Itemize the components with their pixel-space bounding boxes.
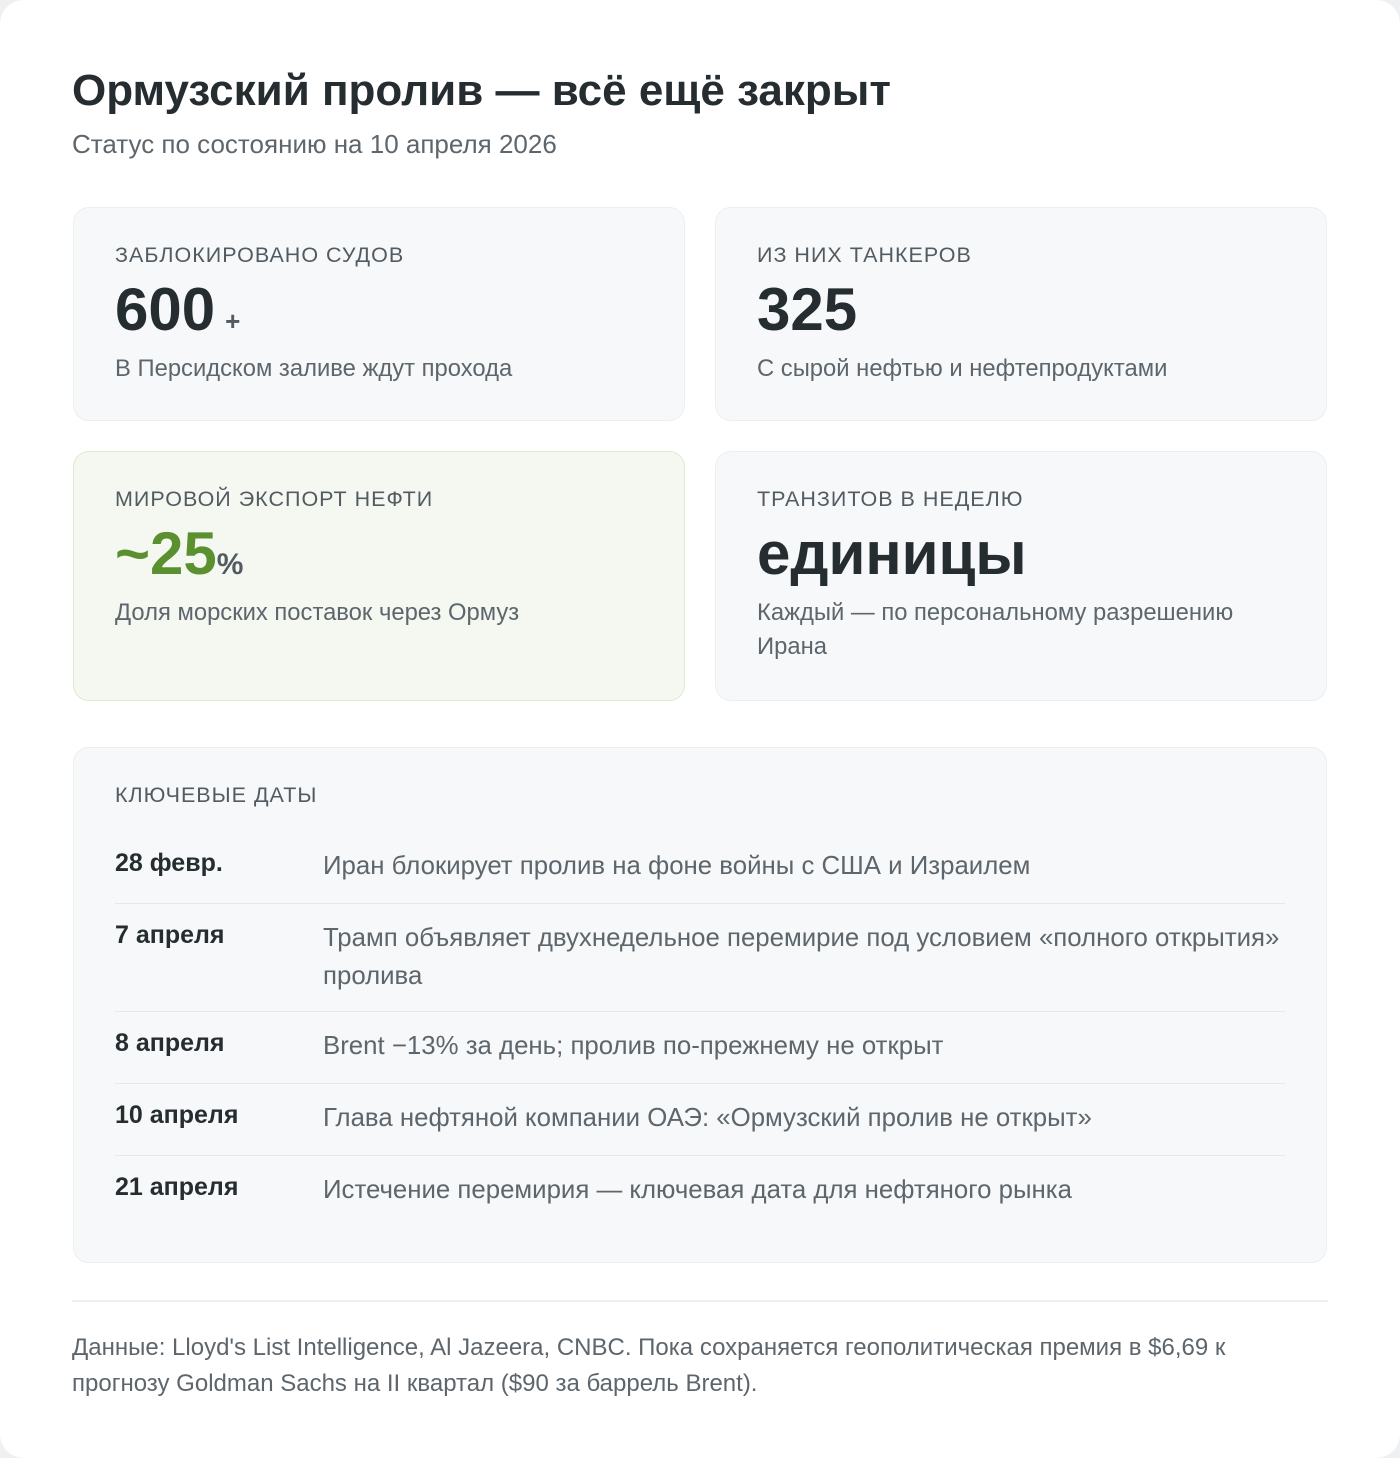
row 28 feb: 28 февр.	[115, 849, 223, 877]
panel: oil export share: ~25%	[115, 520, 243, 587]
title: Ормузский пролив — всё ещё закрыт	[72, 66, 891, 115]
panel: tankers: 325	[757, 276, 857, 343]
row 28 feb: Иран блокирует пролив на фоне войны с США и Израилем	[323, 852, 1030, 880]
panel: transits: Каждый — по персональному разрешению Ирана	[757, 599, 1233, 660]
row 7 april	[115, 904, 1285, 1012]
panel: key dates	[73, 747, 1327, 1263]
row 28 feb	[115, 832, 1285, 904]
panel: tankers: С сырой нефтью и нефтепродуктами	[757, 355, 1167, 382]
panel: blocked ships: В Персидском заливе ждут прохода	[115, 355, 512, 382]
row 21 april: Истечение перемирия — ключевая дата для нефтяного рынка	[323, 1176, 1072, 1204]
row 8 april: Brent −13% за день; пролив по-прежнему не открыт	[323, 1032, 943, 1060]
row 21 april: 21 апреля	[115, 1173, 238, 1201]
row 7 april: Трамп объявляет двухнедельное перемирие под условием «полного открытия» пролива	[323, 924, 1279, 990]
row 10 april	[115, 1084, 1285, 1156]
row 8 april: 8 апреля	[115, 1029, 224, 1057]
panel: blocked ships: ЗАБЛОКИРОВАНО СУДОВ	[115, 243, 404, 267]
panel: oil export share	[73, 451, 685, 701]
panel: oil export share: МИРОВОЙ ЭКСПОРТ НЕФТИ	[115, 487, 433, 511]
panel: tankers	[715, 207, 1327, 421]
footer note: Данные: Lloyd's List Intelligence, Al Jazeera, CNBC. Пока сохраняется геополитическая премия в $6,69 к прогнозу Goldman Sachs на II квартал ($90 за баррель Brent).	[72, 1334, 1225, 1397]
panel: blocked ships: 600 +	[115, 276, 240, 343]
row 7 april: 7 апреля	[115, 921, 224, 949]
row 10 april: Глава нефтяной компании ОАЭ: «Ормузский пролив не открыт»	[323, 1104, 1092, 1132]
panel: transits: единицы	[757, 520, 1027, 587]
row 10 april: 10 апреля	[115, 1101, 238, 1129]
subtitle: Статус по состоянию на 10 апреля 2026	[72, 129, 557, 159]
panel: transits: ТРАНЗИТОВ В НЕДЕЛЮ	[757, 487, 1023, 511]
panel: transits	[715, 451, 1327, 701]
panel: key dates: КЛЮЧЕВЫЕ ДАТЫ	[115, 783, 317, 807]
row 8 april	[115, 1012, 1285, 1084]
panel: oil export share: Доля морских поставок через Ормуз	[115, 599, 519, 626]
panel: blocked ships	[73, 207, 685, 421]
panel: tankers: ИЗ НИХ ТАНКЕРОВ	[757, 243, 972, 267]
